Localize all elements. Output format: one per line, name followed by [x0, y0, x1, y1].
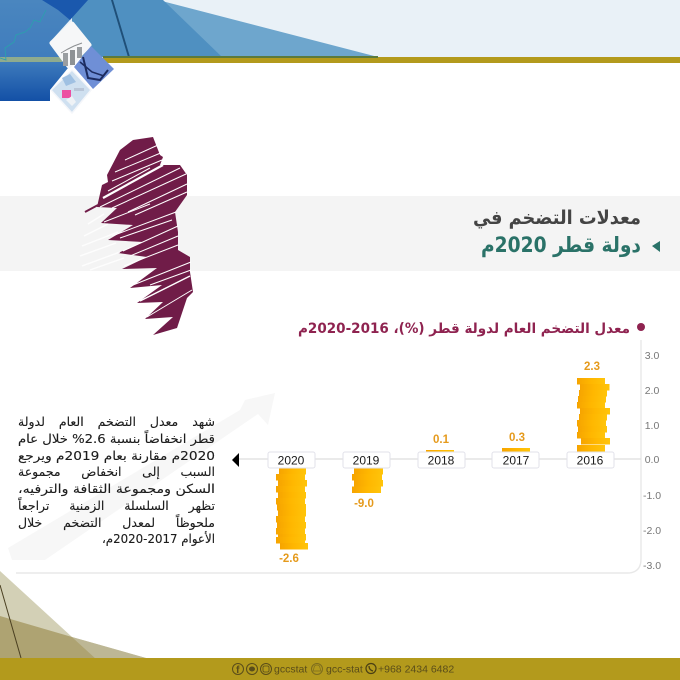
- background band: [0, 196, 680, 271]
- y axis labels: 0.0: [645, 454, 659, 466]
- body paragraph: [18, 413, 215, 547]
- y axis labels: 3.0: [645, 350, 659, 362]
- phone number: +968 2434 6482: [378, 664, 454, 676]
- y axis labels: -2.0: [643, 525, 661, 537]
- title: معدلات التضخم في: [473, 207, 641, 229]
- y axis labels: 2.0: [645, 385, 659, 397]
- tile: blue graph: [74, 46, 114, 89]
- bar 2019: -9.0: [354, 498, 374, 510]
- bar 2017: [492, 432, 539, 468]
- body paragraph: ملحوظاً لمعدل التضخم خلال: [18, 515, 215, 530]
- y axis labels: -3.0: [643, 560, 661, 572]
- bottom left triangles: [0, 571, 146, 658]
- body paragraph: السبب إلى انخفاض مجموعة: [18, 464, 215, 479]
- white scribble inside band: [80, 214, 124, 270]
- bar 2016: [567, 361, 614, 468]
- bar 2019: 2019: [353, 454, 380, 468]
- icon: snapchat: [312, 664, 322, 674]
- title: [473, 207, 660, 257]
- bar 2020: [268, 452, 315, 565]
- qatar scribble map: [85, 137, 193, 335]
- body paragraph: الأعوام 2017-2020م،: [102, 531, 215, 547]
- handle: gcc-stat: gcc-stat: [326, 664, 363, 676]
- icon: facebook: [232, 664, 244, 676]
- tile: documents: [51, 70, 91, 113]
- icon: diamond image tiles: [51, 24, 114, 113]
- bar 2017: 0.3: [509, 432, 525, 444]
- body paragraph: قطر انخفاضاً بنسبة 2.6% خلال عام: [18, 429, 215, 447]
- icon: facebook: f: [236, 664, 240, 676]
- footer contacts: [232, 664, 454, 676]
- header band: [0, 0, 680, 101]
- body paragraph: شهد معدل التضخم العام لدولة: [18, 414, 215, 429]
- bar 2018: 0.1: [433, 434, 450, 446]
- bar 2020: -2.6: [279, 553, 299, 565]
- y axis labels: 1.0: [645, 420, 659, 432]
- icon: whatsapp: [366, 664, 376, 674]
- title: دولة قطر 2020م: [481, 233, 641, 257]
- bar 2018: 2018: [428, 454, 455, 468]
- background arrow: [8, 393, 275, 560]
- baseline arrow: [232, 453, 641, 467]
- bar 2020: 2020: [278, 454, 305, 468]
- body paragraph: 2020م مقارنة بعام 2019م ويرجع: [18, 448, 215, 464]
- body paragraph: السكن ومجموعة الثقافة والترفيه،: [18, 481, 215, 497]
- bar 2017: 2017: [503, 454, 530, 468]
- body paragraph: تظهر السلسلة الزمنية تراجعاً: [18, 498, 215, 513]
- icon: teal triangle marker: [652, 241, 660, 252]
- chart heading: معدل التضخم العام لدولة قطر (%)، 2016-2020م: [298, 321, 630, 337]
- icon: instagram: [260, 664, 272, 674]
- chart frame: [16, 340, 641, 573]
- tile: bar chart: [52, 24, 89, 66]
- handle: gccstat: gccstat: [274, 664, 307, 676]
- chart: [16, 340, 661, 573]
- y axis labels: [643, 350, 661, 572]
- bar 2018: [418, 434, 465, 468]
- y axis labels: -1.0: [643, 490, 661, 502]
- footer band: [0, 658, 680, 680]
- bar 2019: [343, 452, 390, 510]
- icon: twitter: [246, 664, 258, 674]
- bar 2016: 2.3: [584, 361, 600, 373]
- bar 2016: 2016: [577, 454, 604, 468]
